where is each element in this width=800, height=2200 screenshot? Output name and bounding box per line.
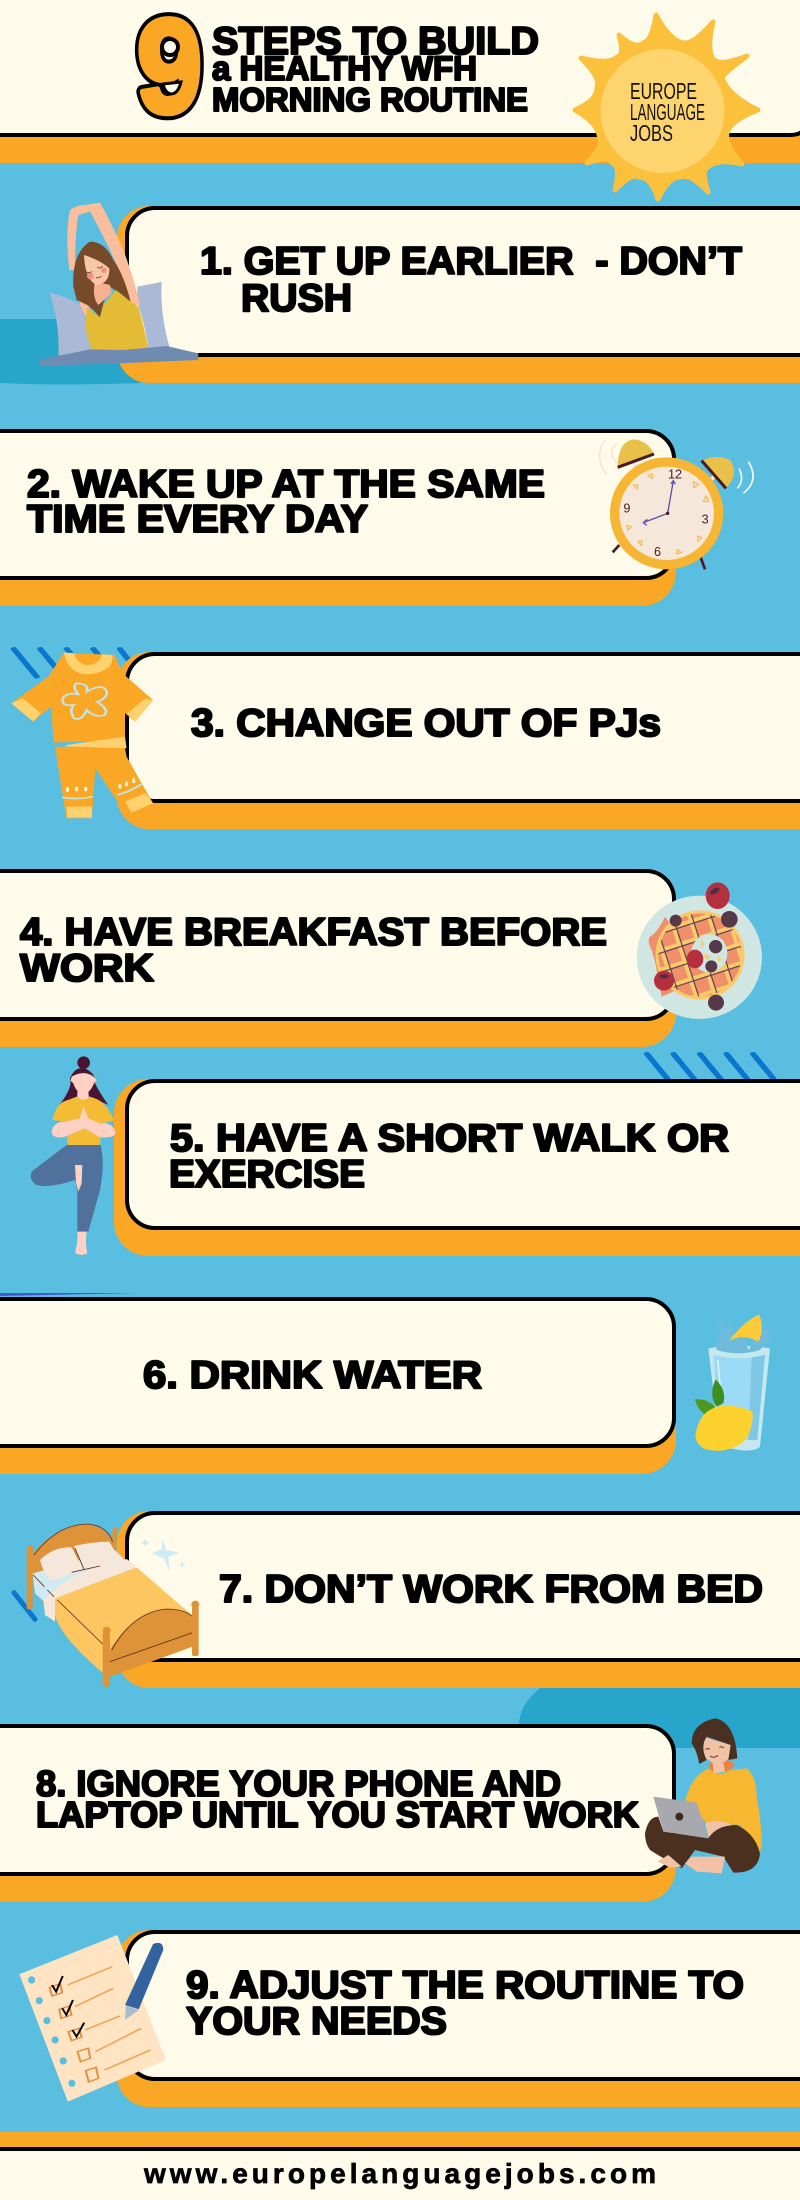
- panel 4: have breakfast: [0, 869, 676, 1047]
- panel 5: short walk or exercise: EXERCISE: [169, 1153, 365, 1196]
- panel 9: adjust the routine: 9. ADJUST THE ROUTINE TO: [186, 1964, 744, 2007]
- header banner: [0, 0, 800, 163]
- panel 5: short walk or exercise: [114, 1079, 800, 1256]
- icon: waffle plate: [637, 882, 763, 1019]
- panel 1: get up earlier: RUSH: [241, 277, 352, 320]
- panel 1: get up earlier: [117, 206, 800, 383]
- panel 6: drink water: [0, 1297, 676, 1474]
- icon: alarm clock: 3: [702, 512, 709, 526]
- panel 2: wake up at the same time: 2. WAKE UP AT THE SAME: [27, 463, 545, 506]
- panel 2: wake up at the same time: [0, 429, 676, 606]
- panel 8: ignore your phone: [0, 1724, 676, 1902]
- icon: alarm clock: 9: [623, 502, 630, 516]
- panel 8: ignore your phone: LAPTOP UNTIL YOU START WORK: [36, 1794, 640, 1835]
- title: [137, 0, 539, 141]
- icon: alarm clock: [600, 439, 753, 569]
- website url: www.europelanguagejobs.com: [143, 2158, 656, 2189]
- decorative stripes: panel 5: [647, 1054, 773, 1079]
- panel 9: adjust the routine: [117, 1930, 800, 2107]
- title line 2: a HEALTHY WFH: [212, 50, 477, 88]
- panel 8: ignore your phone: 8. IGNORE YOUR PHONE AND: [36, 1763, 561, 1804]
- panel 1: get up earlier: 1. GET UP EARLIER - DON’T: [200, 240, 742, 283]
- logo: sun: EUROPE: [630, 78, 697, 104]
- icon: alarm clock: 6: [654, 545, 661, 559]
- logo: sun: LANGUAGE: [630, 99, 705, 125]
- icon: yoga woman: [31, 1056, 116, 1255]
- icon: alarm clock: 12: [668, 468, 682, 482]
- panel 7: don't work from bed: [117, 1511, 800, 1688]
- panel 3: change out of pjs: 3. CHANGE OUT OF PJs: [191, 702, 661, 745]
- icon: bed: [14, 1524, 199, 1687]
- logo: sun: JOBS: [630, 120, 673, 146]
- panel 7: don't work from bed: 7. DON’T WORK FROM BED: [219, 1568, 763, 1611]
- panel 6: drink water: 6. DRINK WATER: [143, 1354, 482, 1397]
- icon: stretching woman in bed: [39, 203, 198, 366]
- panel 2: wake up at the same time: TIME EVERY DAY: [27, 498, 368, 541]
- panel 4: have breakfast: WORK: [20, 947, 154, 990]
- icon: checklist and pen: [19, 1935, 166, 2102]
- title line 1: STEPS TO BUILD: [212, 20, 539, 63]
- panel 3: change out of pjs: [117, 652, 800, 829]
- icon: woman with laptop: [645, 1718, 762, 1873]
- panel 9: adjust the routine: YOUR NEEDS: [186, 2000, 447, 2043]
- icon: water glass with lemon: [695, 1314, 770, 1451]
- footer banner: [0, 2132, 800, 2200]
- decorative stripes: pyjamas: [14, 649, 138, 677]
- logo: sun: [575, 15, 758, 199]
- title line 3: MORNING ROUTINE: [212, 81, 528, 118]
- panel 4: have breakfast: 4. HAVE BREAKFAST BEFORE: [20, 911, 607, 954]
- panel 5: short walk or exercise: 5. HAVE A SHORT WALK OR: [170, 1117, 729, 1160]
- icon: pyjamas: [11, 653, 153, 818]
